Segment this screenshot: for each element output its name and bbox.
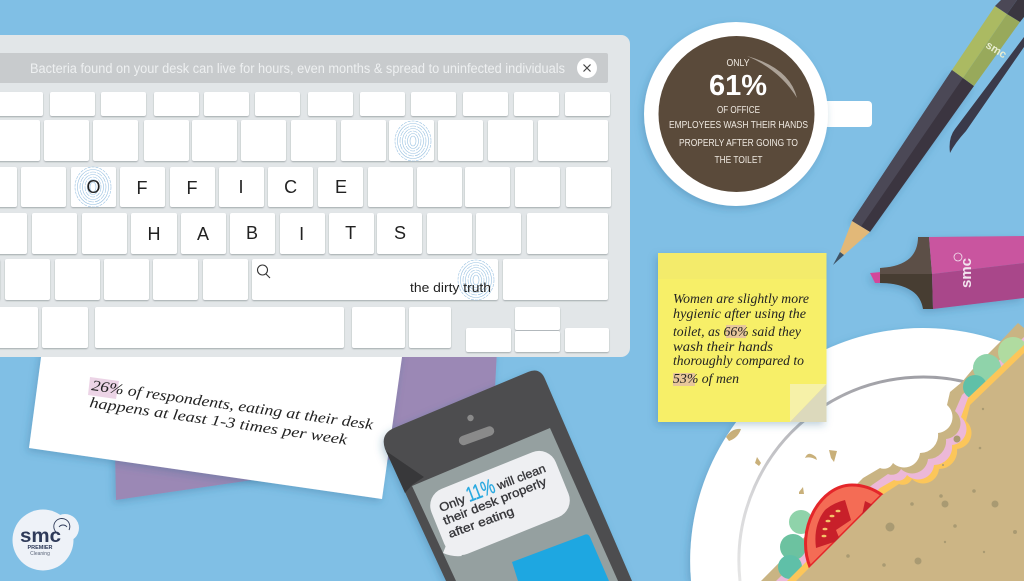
fingerprint: upper key: [395, 121, 431, 161]
bubble text: 11%: [463, 475, 498, 507]
pen top: [995, 0, 1024, 22]
bubble text: will clean: [494, 461, 548, 493]
bread specks: [846, 408, 1017, 567]
keyboard: [0, 35, 630, 357]
bar message: Bacteria found on your desk can live for hours, even months & spread to uninfected individuals: [30, 61, 565, 76]
highlighter: [870, 236, 1024, 309]
pencil lead: [833, 252, 844, 265]
title: HABITS: I: [299, 224, 304, 244]
pencil wood: [840, 221, 870, 255]
pen logo: smc: [983, 39, 1008, 61]
bubble text: after eating: [446, 504, 516, 541]
highlighter cap: [880, 237, 932, 274]
sandwich: [761, 323, 1024, 581]
cup text: EMPLOYEES WASH THEIR HANDS: [669, 120, 808, 131]
title: HABITS: A: [197, 224, 209, 244]
ham: [776, 337, 1024, 581]
icon: search: [258, 265, 270, 278]
title: OFFICE: [86, 177, 347, 198]
bubble text: their desk properly: [441, 474, 548, 528]
subtitle: the dirty truth: the dirty truth: [410, 280, 491, 295]
cup text: ONLY: [726, 58, 750, 69]
plate inner ring: [739, 377, 1000, 581]
phone shadow side: [386, 451, 424, 493]
tomato: [806, 485, 882, 567]
plate: [690, 328, 1024, 581]
sticky note: [658, 253, 826, 422]
fingerprint: O key: [75, 167, 111, 207]
cup text: OF OFFICE: [717, 105, 760, 116]
sticky handwritten text: Women are slightly more: [673, 292, 809, 307]
cup handle: [815, 101, 872, 127]
bubble text: [435, 456, 549, 541]
handwritten note text: happens at least 1-3 times per week: [88, 395, 348, 449]
highlighter logo: [954, 253, 975, 288]
speech bubble: [425, 445, 575, 561]
sticky top band: [658, 253, 826, 279]
bubble text: Only: [437, 492, 467, 515]
sticky handwritten text: [673, 292, 809, 387]
keys: [0, 92, 611, 352]
title: OFFICE: E: [335, 177, 347, 197]
highlight: 26%: [88, 377, 119, 399]
sticky handwritten text: toilet, as 66% said they: [673, 325, 802, 340]
phone screen: [412, 428, 618, 581]
title: HABITS: S: [394, 223, 406, 243]
logo premier: PREMIER: [27, 545, 53, 551]
logo wordmark: smc: [20, 526, 61, 547]
fingerprint: dirty truth key: [458, 260, 494, 300]
notification bar: [0, 53, 608, 83]
sticky highlight: 53%: [673, 373, 695, 386]
crumbs: [726, 429, 837, 494]
phone camera: [467, 415, 474, 421]
cup text: PROPERLY AFTER GOING TO: [679, 138, 798, 149]
sticky handwritten text: wash their hands: [673, 340, 774, 355]
purple sheet of paper: [113, 350, 497, 500]
sticky highlight: 66%: [726, 325, 746, 338]
title: OFFICE: I: [238, 177, 244, 197]
close button: [577, 58, 597, 78]
coffee highlight: [747, 56, 797, 98]
cup rim: [644, 22, 828, 206]
title: HABITS: B: [246, 223, 258, 243]
crust behind: [761, 323, 1024, 581]
handwritten note text: 26% of respondents, eating at their desk: [90, 378, 374, 434]
logo cleaning: Cleaning: [30, 551, 50, 557]
highlighter body: [929, 236, 1024, 274]
cup text: [669, 58, 808, 166]
smartphone: [384, 371, 632, 581]
title: OFFICE: F: [186, 178, 198, 198]
white note: eating at desk: [29, 350, 403, 499]
cup text: 61%: [709, 70, 767, 102]
logo swirl: [54, 518, 70, 532]
pen green band: [952, 6, 1020, 86]
title: OFFICE: F: [136, 178, 148, 198]
title: OFFICE: O: [86, 177, 101, 197]
bread: [796, 353, 1024, 581]
phone speaker: [458, 425, 496, 447]
title: HABITS: [148, 223, 406, 244]
cup text: THE TOILET: [714, 155, 762, 166]
sticky folded corner: [790, 384, 826, 422]
pen: [833, 0, 1024, 265]
coffee cup: [644, 22, 872, 206]
pen body: [852, 70, 963, 226]
sticky handwritten text: thoroughly compared to: [673, 354, 804, 369]
title: HABITS: H: [148, 224, 160, 244]
handwritten note text: [88, 378, 374, 449]
highlighter tip: [870, 272, 881, 283]
sticky handwritten text: 53% of men: [673, 372, 739, 387]
cheese: [787, 345, 1024, 581]
lettuce: [778, 337, 1024, 579]
logo: smc premier cleaning: [12, 510, 79, 570]
highlighter logo: smc: [958, 258, 975, 288]
pen clip: [950, 37, 1024, 153]
title: HABITS: T: [345, 223, 356, 243]
blue app tile: [512, 534, 609, 581]
sticky handwritten text: hygienic after using the: [673, 307, 806, 322]
coffee: [658, 36, 814, 192]
title: OFFICE: C: [284, 177, 297, 197]
